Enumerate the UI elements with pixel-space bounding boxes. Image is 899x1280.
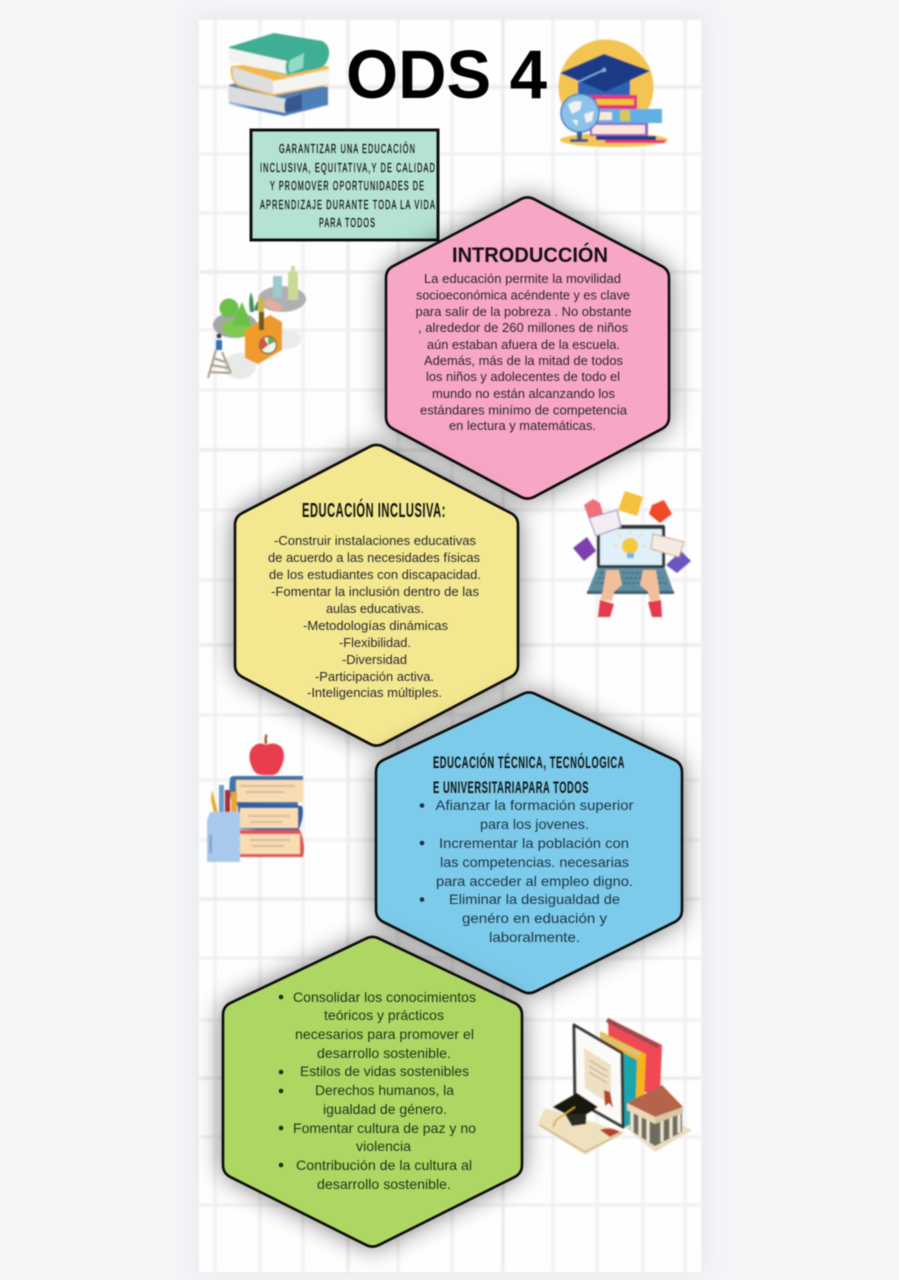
panel: educación técnica, tecnológica y universitaria: genéro en eduación y [462,910,607,926]
panel: introducción: La educación permite la movilidad [424,271,621,286]
panel: educación técnica, tecnológica y universitaria: laboralmente. [489,929,580,945]
panel: educación para el desarrollo sostenible: Contribución de la cultura al [296,1157,472,1173]
panel: educación inclusiva: -Construir instalaciones educativas [274,533,476,548]
panel: educación para el desarrollo sostenible: Derechos humanos, la [315,1082,454,1098]
title: ODS 4 [346,36,547,113]
panel: goal statement: APRENDIZAJE DURANTE TODA LA VIDA [260,197,436,212]
panel: introducción: Además, más de la mitad de todos [424,353,623,368]
icon: graduation cap, globe and books [558,40,668,147]
panel: educación inclusiva [235,445,518,746]
panel: educación técnica, tecnológica y universitaria: Afianzar la formación superior [436,797,634,813]
panel: educación inclusiva: de los estudiantes con discapacidad. [269,567,481,582]
panel: introducción: para salir de la pobreza . No obstante [416,304,632,319]
panel: educación inclusiva: -Participación activa. [315,669,434,684]
panel: educación inclusiva: -Flexibilidad. [339,635,411,650]
panel: educación inclusiva: aulas educativas. [326,601,424,616]
panel: goal statement: INCLUSIVA, EQUITATIVA,Y DE CALIDAD [260,160,436,175]
panel: introducción: en lectura y matemáticas. [449,418,596,433]
icon: sustainable city on plates [208,266,306,379]
panel: introducción: INTRODUCCIÓN [452,243,608,267]
panel: educación técnica, tecnológica y universitaria: EDUCACIÓN TÉCNICA, TECNÓLOGICA [433,753,625,772]
panel: educación inclusiva: -Metodologías dinámicas [303,618,448,633]
panel: introducción: los niños y adolecentes de todo el [426,369,620,384]
panel: goal statement: Y PROMOVER OPORTUNIDADES DE [270,178,425,193]
panel: educación técnica, tecnológica y universitaria: para acceder al empleo digno. [436,873,633,889]
panel: educación técnica, tecnológica y universitaria: Eliminar la desigualdad de [449,891,620,907]
panel: introducción: mundo no están alcanzando los [432,386,615,401]
panel: introducción [386,197,669,499]
panel: educación técnica, tecnológica y universitaria: Incrementar la población con [439,835,629,851]
panel: page background with grid [192,12,708,1276]
panel: educación para el desarrollo sostenible: Consolidar los conocimientos [293,989,476,1005]
panel: educación inclusiva: -Diversidad [342,652,407,667]
panel: educación inclusiva: EDUCACIÓN INCLUSIVA: [302,498,446,522]
panel: educación técnica, tecnológica y universitaria [376,692,682,993]
icon: apple on books with pencil jar [207,735,304,862]
panel: educación para el desarrollo sostenible: Estilos de vidas sostenibles [300,1063,469,1079]
panel: introducción: , alrededor de 260 millones de niños [418,320,628,335]
panel: educación para el desarrollo sostenible: necesarios para promover el [295,1026,474,1042]
panel: goal statement [251,130,438,240]
panel: goal statement: GARANTIZAR UNA EDUCACIÓN [279,141,416,156]
panel: educación inclusiva: -Fomentar la inclusión dentro de las [271,584,479,599]
panel: educación para el desarrollo sostenible: desarrollo sostenible. [317,1176,451,1192]
panel: introducción: aún estaban afuera de la escuela. [427,337,620,352]
panel: introducción: estándares minímo de competencia [420,402,628,418]
panel: educación para el desarrollo sostenible: Fomentar cultura de paz y no [293,1120,476,1136]
panel: introducción: socioeconómica acéndente y es clave [416,288,630,302]
panel: educación para el desarrollo sostenible: teóricos y prácticos [324,1007,444,1023]
panel: educación para el desarrollo sostenible: violencia [356,1138,411,1154]
panel: educación inclusiva: -Inteligencias múltiples. [307,685,442,700]
icon: laptop with light bulb and books [573,491,691,617]
panel: educación técnica, tecnológica y universitaria: para los jovenes. [480,816,589,832]
panel: educación técnica, tecnológica y universitaria: E UNIVERSITARIAPARA TODOS [433,779,589,797]
panel: educación técnica, tecnológica y universitaria: las competencias. necesarias [440,854,629,870]
panel: educación inclusiva: de acuerdo a las necesidades físicas [268,550,480,565]
panel: goal statement: PARA TODOS [319,215,376,230]
panel: educación para el desarrollo sostenible [223,937,522,1247]
icon: diploma, books and university building [537,1018,692,1155]
panel: educación para el desarrollo sostenible: desarrollo sostenible. [317,1045,451,1061]
icon: stack of books [227,33,329,116]
panel: educación para el desarrollo sostenible: igualdad de género. [323,1101,447,1117]
